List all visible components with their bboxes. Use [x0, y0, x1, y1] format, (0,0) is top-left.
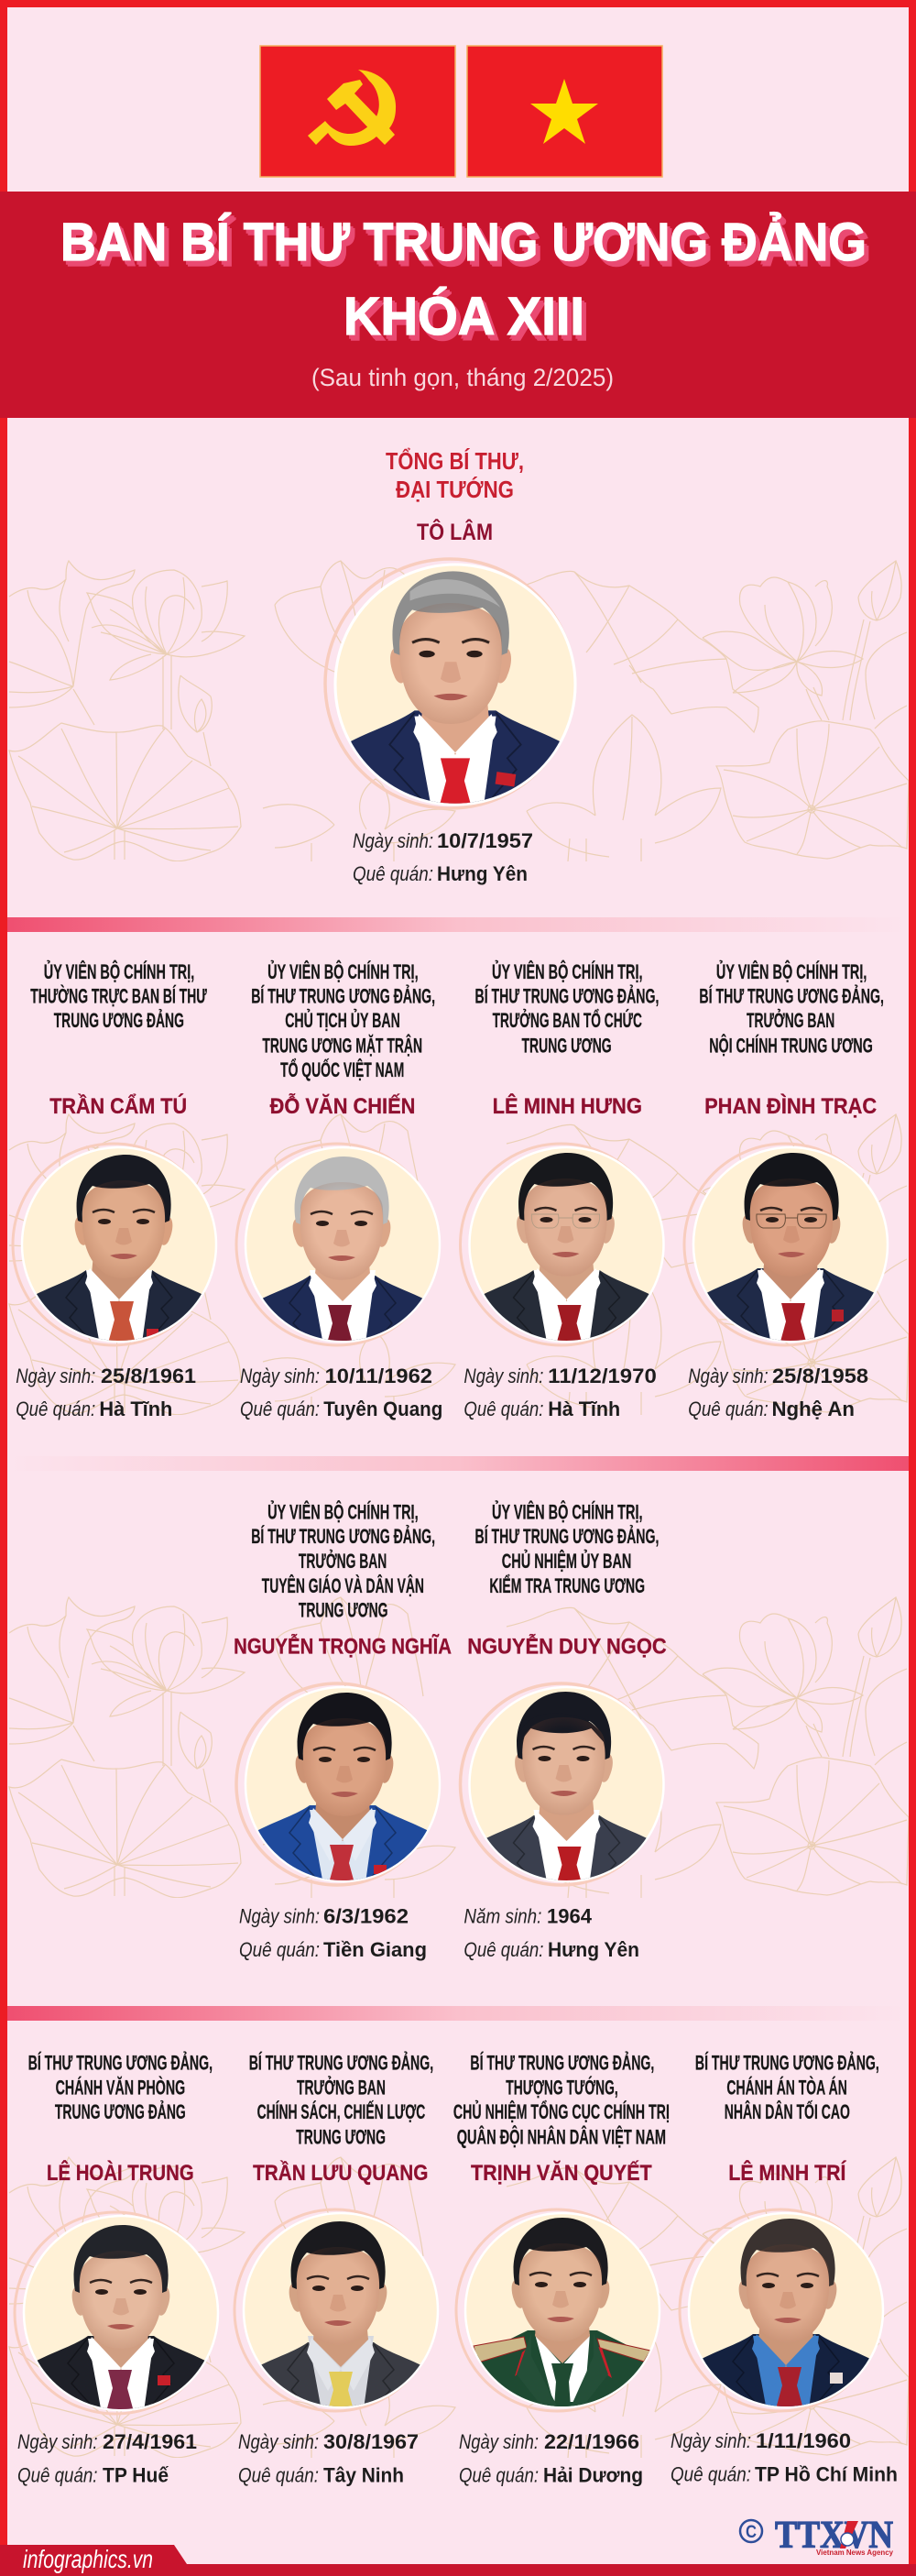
role text: NHÂN DÂN TỐI CAO: [725, 2099, 850, 2123]
role text: [695, 2051, 879, 2123]
name: LÊ HOÀI TRUNG: [47, 2160, 194, 2186]
portrait: [460, 1683, 672, 1909]
name: PHAN ĐÌNH TRẠC: [704, 1093, 877, 1119]
birth info: 11/12/1970: [548, 1365, 657, 1387]
role text: ỦY VIÊN BỘ CHÍNH TRỊ,: [267, 960, 419, 983]
role text: TRUNG ƯƠNG: [299, 1599, 388, 1622]
birth info: [16, 1365, 196, 1420]
birth info: [238, 2430, 419, 2487]
role: [386, 447, 524, 503]
member: Lê Minh Trí: [671, 2051, 898, 2486]
member: Phan Đình Trạc: [684, 960, 896, 1420]
role: TỔNG BÍ THƯ,: [386, 447, 524, 475]
birth info: Quê quán:: [16, 1398, 95, 1420]
role text: BÍ THƯ TRUNG ƯƠNG ĐẢNG,: [28, 2051, 213, 2075]
birth info: [463, 1365, 657, 1420]
birth info: Quê quán:: [671, 2463, 751, 2486]
copyright logo: TTXVN: TTXVN: [775, 2515, 893, 2557]
title: KHÓA XIII: [344, 287, 584, 346]
role text: BÍ THƯ TRUNG ƯƠNG ĐẢNG,: [474, 1525, 659, 1548]
copyright logo: TTXVN: C: [746, 2523, 757, 2542]
role: ĐẠI TƯỚNG: [396, 476, 514, 503]
role text: BÍ THƯ TRUNG ƯƠNG ĐẢNG,: [470, 2051, 654, 2075]
footer bar: [0, 2545, 916, 2576]
title shadow: [63, 216, 871, 352]
role text: BÍ THƯ TRUNG ƯƠNG ĐẢNG,: [474, 984, 659, 1008]
birth info: Hải Dương: [543, 2464, 643, 2487]
source: infographics.vn: infographics.vn: [23, 2545, 153, 2573]
birth info: 10/11/1962: [325, 1365, 432, 1387]
panel: section 2 members: [13, 960, 896, 1420]
section dividers: [7, 917, 909, 2021]
role text: TRUNG ƯƠNG ĐẢNG: [55, 2100, 186, 2123]
title banner: [0, 192, 916, 418]
birth info: Ngày sinh:: [671, 2429, 751, 2452]
birth info: Ngày sinh:: [16, 1365, 95, 1387]
birth info: [240, 1365, 442, 1420]
birth info: Quê quán:: [239, 1938, 320, 1961]
birth info: 25/8/1958: [772, 1365, 868, 1387]
birth info: 25/8/1961: [101, 1365, 196, 1387]
portrait: [234, 2209, 446, 2436]
portrait: [460, 1144, 672, 1364]
role text: TRƯỞNG BAN: [297, 2077, 386, 2099]
role text: ỦY VIÊN BỘ CHÍNH TRỊ,: [44, 960, 194, 983]
role text: ỦY VIÊN BỘ CHÍNH TRỊ,: [267, 1500, 419, 1523]
national flag: [467, 46, 662, 177]
name: ĐỖ VĂN CHIẾN: [270, 1092, 415, 1119]
birth info: Quê quán:: [463, 1398, 543, 1420]
birth info: Ngày sinh:: [240, 1365, 320, 1387]
name: LÊ MINH HƯNG: [493, 1093, 642, 1119]
birth info: Hà Tĩnh: [548, 1398, 620, 1420]
role text: TRUNG ƯƠNG: [296, 2126, 386, 2148]
birth info: Năm sinh:: [463, 1905, 541, 1928]
role text: BÍ THƯ TRUNG ƯƠNG ĐẢNG,: [251, 984, 435, 1008]
role text: [249, 2051, 433, 2148]
role text: QUÂN ĐỘI NHÂN DÂN VIỆT NAM: [457, 2126, 666, 2148]
portrait ring: [325, 559, 574, 808]
portrait: [15, 2212, 226, 2429]
role text: TRƯỞNG BAN TỔ CHỨC: [493, 1009, 642, 1032]
role text: BÍ THƯ TRUNG ƯƠNG ĐẢNG,: [249, 2051, 433, 2075]
birth info: Quê quán:: [463, 1938, 543, 1961]
member: Trịnh Văn Quyết: [453, 2051, 670, 2487]
birth info: 6/3/1962: [323, 1905, 409, 1928]
role text: [474, 1500, 659, 1597]
birth info: 30/8/1967: [323, 2430, 419, 2453]
name: TRẦN LƯU QUANG: [253, 2160, 428, 2186]
lotus background pattern, section 3: [9, 1597, 909, 1898]
portrait: [680, 2209, 891, 2428]
role text: CHỦ NHIỆM ỦY BAN: [502, 1550, 631, 1573]
member: Trần Cẩm Tú: [13, 960, 224, 1420]
birth info: Hưng Yên: [437, 862, 528, 885]
copyright logo: TTXVN: Vietnam News Agency: [816, 2548, 893, 2557]
portrait: Tô Lâm: [333, 563, 577, 806]
birth info: Quê quán:: [353, 862, 433, 885]
role text: CHÁNH VĂN PHÒNG: [56, 2077, 185, 2099]
name: NGUYỄN DUY NGỌC: [467, 1633, 667, 1660]
birth info: [353, 829, 533, 885]
birth info: Hà Tĩnh: [99, 1398, 172, 1420]
role text: TRUNG ƯƠNG ĐẢNG: [54, 1009, 184, 1032]
birth info: Ngày sinh:: [688, 1365, 769, 1387]
birth info: Ngày sinh:: [459, 2430, 539, 2453]
role text: [699, 960, 884, 1058]
title shadow: KHÓA XIII: [348, 292, 589, 352]
birth info: Nghệ An: [771, 1398, 855, 1420]
birth info: Quê quán:: [240, 1398, 320, 1420]
header flags: [260, 46, 662, 177]
title: BAN BÍ THƯ TRUNG ƯƠNG ĐẢNG: [60, 213, 867, 272]
role text: ỦY VIÊN BỘ CHÍNH TRỊ,: [492, 1500, 643, 1523]
title shadow: KHÓA XIII: [346, 290, 587, 350]
birth info: Quê quán:: [688, 1398, 769, 1420]
member: Đỗ Văn Chiến: [236, 960, 448, 1420]
birth info: 27/4/1961: [103, 2430, 197, 2453]
portrait: [456, 2209, 668, 2429]
lotus background pattern, section 2: [9, 1114, 909, 1415]
birth info: 1964: [547, 1905, 593, 1928]
role text: CHÁNH ÁN TÒA ÁN: [726, 2077, 847, 2099]
birth info: [688, 1365, 868, 1420]
role text: [474, 960, 659, 1058]
name: NGUYỄN TRỌNG NGHĨA: [234, 1633, 452, 1660]
panel: section 3 members: [234, 1500, 672, 1961]
portrait: [236, 1683, 448, 1899]
role text: TRƯỞNG BAN: [299, 1550, 387, 1573]
lotus background pattern, section 1: [9, 561, 909, 861]
birth info: [671, 2429, 898, 2486]
role text: THƯỢNG TƯỚNG,: [506, 2077, 618, 2099]
portrait: [684, 1144, 896, 1362]
title shadow: BAN BÍ THƯ TRUNG ƯƠNG ĐẢNG: [65, 218, 871, 278]
name: TRỊNH VĂN QUYẾT: [471, 2160, 652, 2186]
name: TRẦN CẨM TÚ: [49, 1093, 187, 1119]
role text: TỔ QUỐC VIỆT NAM: [280, 1058, 404, 1081]
birth info: Tiền Giang: [323, 1938, 427, 1961]
member: Nguyễn Trọng Nghĩa: [234, 1500, 452, 1961]
birth info: 1/11/1960: [756, 2429, 851, 2452]
panel: General Secretary: [325, 447, 585, 885]
role text: CHÍNH SÁCH, CHIẾN LƯỢC: [257, 2100, 425, 2123]
role text: TRUNG ƯƠNG: [522, 1034, 612, 1058]
role text: [251, 1500, 435, 1622]
portrait: [234, 1142, 442, 1347]
title shadow: BAN BÍ THƯ TRUNG ƯƠNG ĐẢNG: [63, 216, 869, 276]
birth info: [459, 2430, 643, 2487]
copyright logo: TTXVN: [740, 2515, 893, 2557]
birth info: Ngày sinh:: [353, 829, 433, 852]
party flag: [260, 46, 455, 177]
member: Lê Hoài Trung: [15, 2051, 226, 2487]
birth info: Ngày sinh:: [17, 2430, 97, 2453]
title: [60, 213, 867, 346]
role text: TRƯỞNG BAN: [747, 1009, 834, 1032]
portrait: [13, 1144, 224, 1364]
birth info: Ngày sinh:: [463, 1365, 543, 1387]
birth info: Tuyên Quang: [323, 1398, 442, 1420]
birth info: Quê quán:: [459, 2464, 539, 2487]
birth info: Tây Ninh: [323, 2464, 404, 2487]
role text: TUYÊN GIÁO VÀ DÂN VẬN: [262, 1574, 424, 1597]
birth info: Quê quán:: [238, 2464, 319, 2487]
role text: [453, 2051, 670, 2148]
birth info: Hưng Yên: [548, 1938, 639, 1961]
birth info: [463, 1905, 639, 1961]
panel: section 4 members: [15, 2051, 898, 2487]
role text: [251, 960, 435, 1081]
birth info: TP Huế: [103, 2464, 169, 2487]
birth info: 22/1/1966: [544, 2430, 639, 2453]
name: LÊ MINH TRÍ: [728, 2160, 847, 2186]
birth info: 10/7/1957: [437, 829, 533, 852]
birth info: Ngày sinh:: [239, 1905, 320, 1928]
role text: BÍ THƯ TRUNG ƯƠNG ĐẢNG,: [251, 1525, 435, 1548]
member: Lê Minh Hưng: [460, 960, 672, 1420]
member: Nguyễn Duy Ngọc: [460, 1500, 672, 1961]
member: Trần Lưu Quang: [234, 2051, 446, 2487]
role text: [28, 2051, 213, 2123]
birth info: TP Hồ Chí Minh: [755, 2463, 898, 2486]
birth info: Ngày sinh:: [238, 2430, 319, 2453]
birth info: Quê quán:: [17, 2464, 97, 2487]
name: TÔ LÂM: [417, 518, 493, 545]
role text: KIỂM TRA TRUNG ƯƠNG: [489, 1574, 645, 1597]
lotus background pattern, section 4: [9, 2157, 909, 2458]
role text: TRUNG ƯƠNG MẶT TRẬN: [262, 1034, 422, 1058]
subtitle: (Sau tinh gọn, tháng 2/2025): [311, 364, 614, 391]
birth info: [17, 2430, 197, 2487]
role text: THƯỜNG TRỰC BAN BÍ THƯ: [30, 984, 207, 1008]
role text: CHỦ NHIỆM TỔNG CỤC CHÍNH TRỊ: [453, 2100, 670, 2123]
role text: CHỦ TỊCH ỦY BAN: [285, 1009, 400, 1032]
role text: [30, 960, 207, 1032]
role text: ỦY VIÊN BỘ CHÍNH TRỊ,: [492, 960, 643, 983]
birth info: [239, 1905, 427, 1961]
